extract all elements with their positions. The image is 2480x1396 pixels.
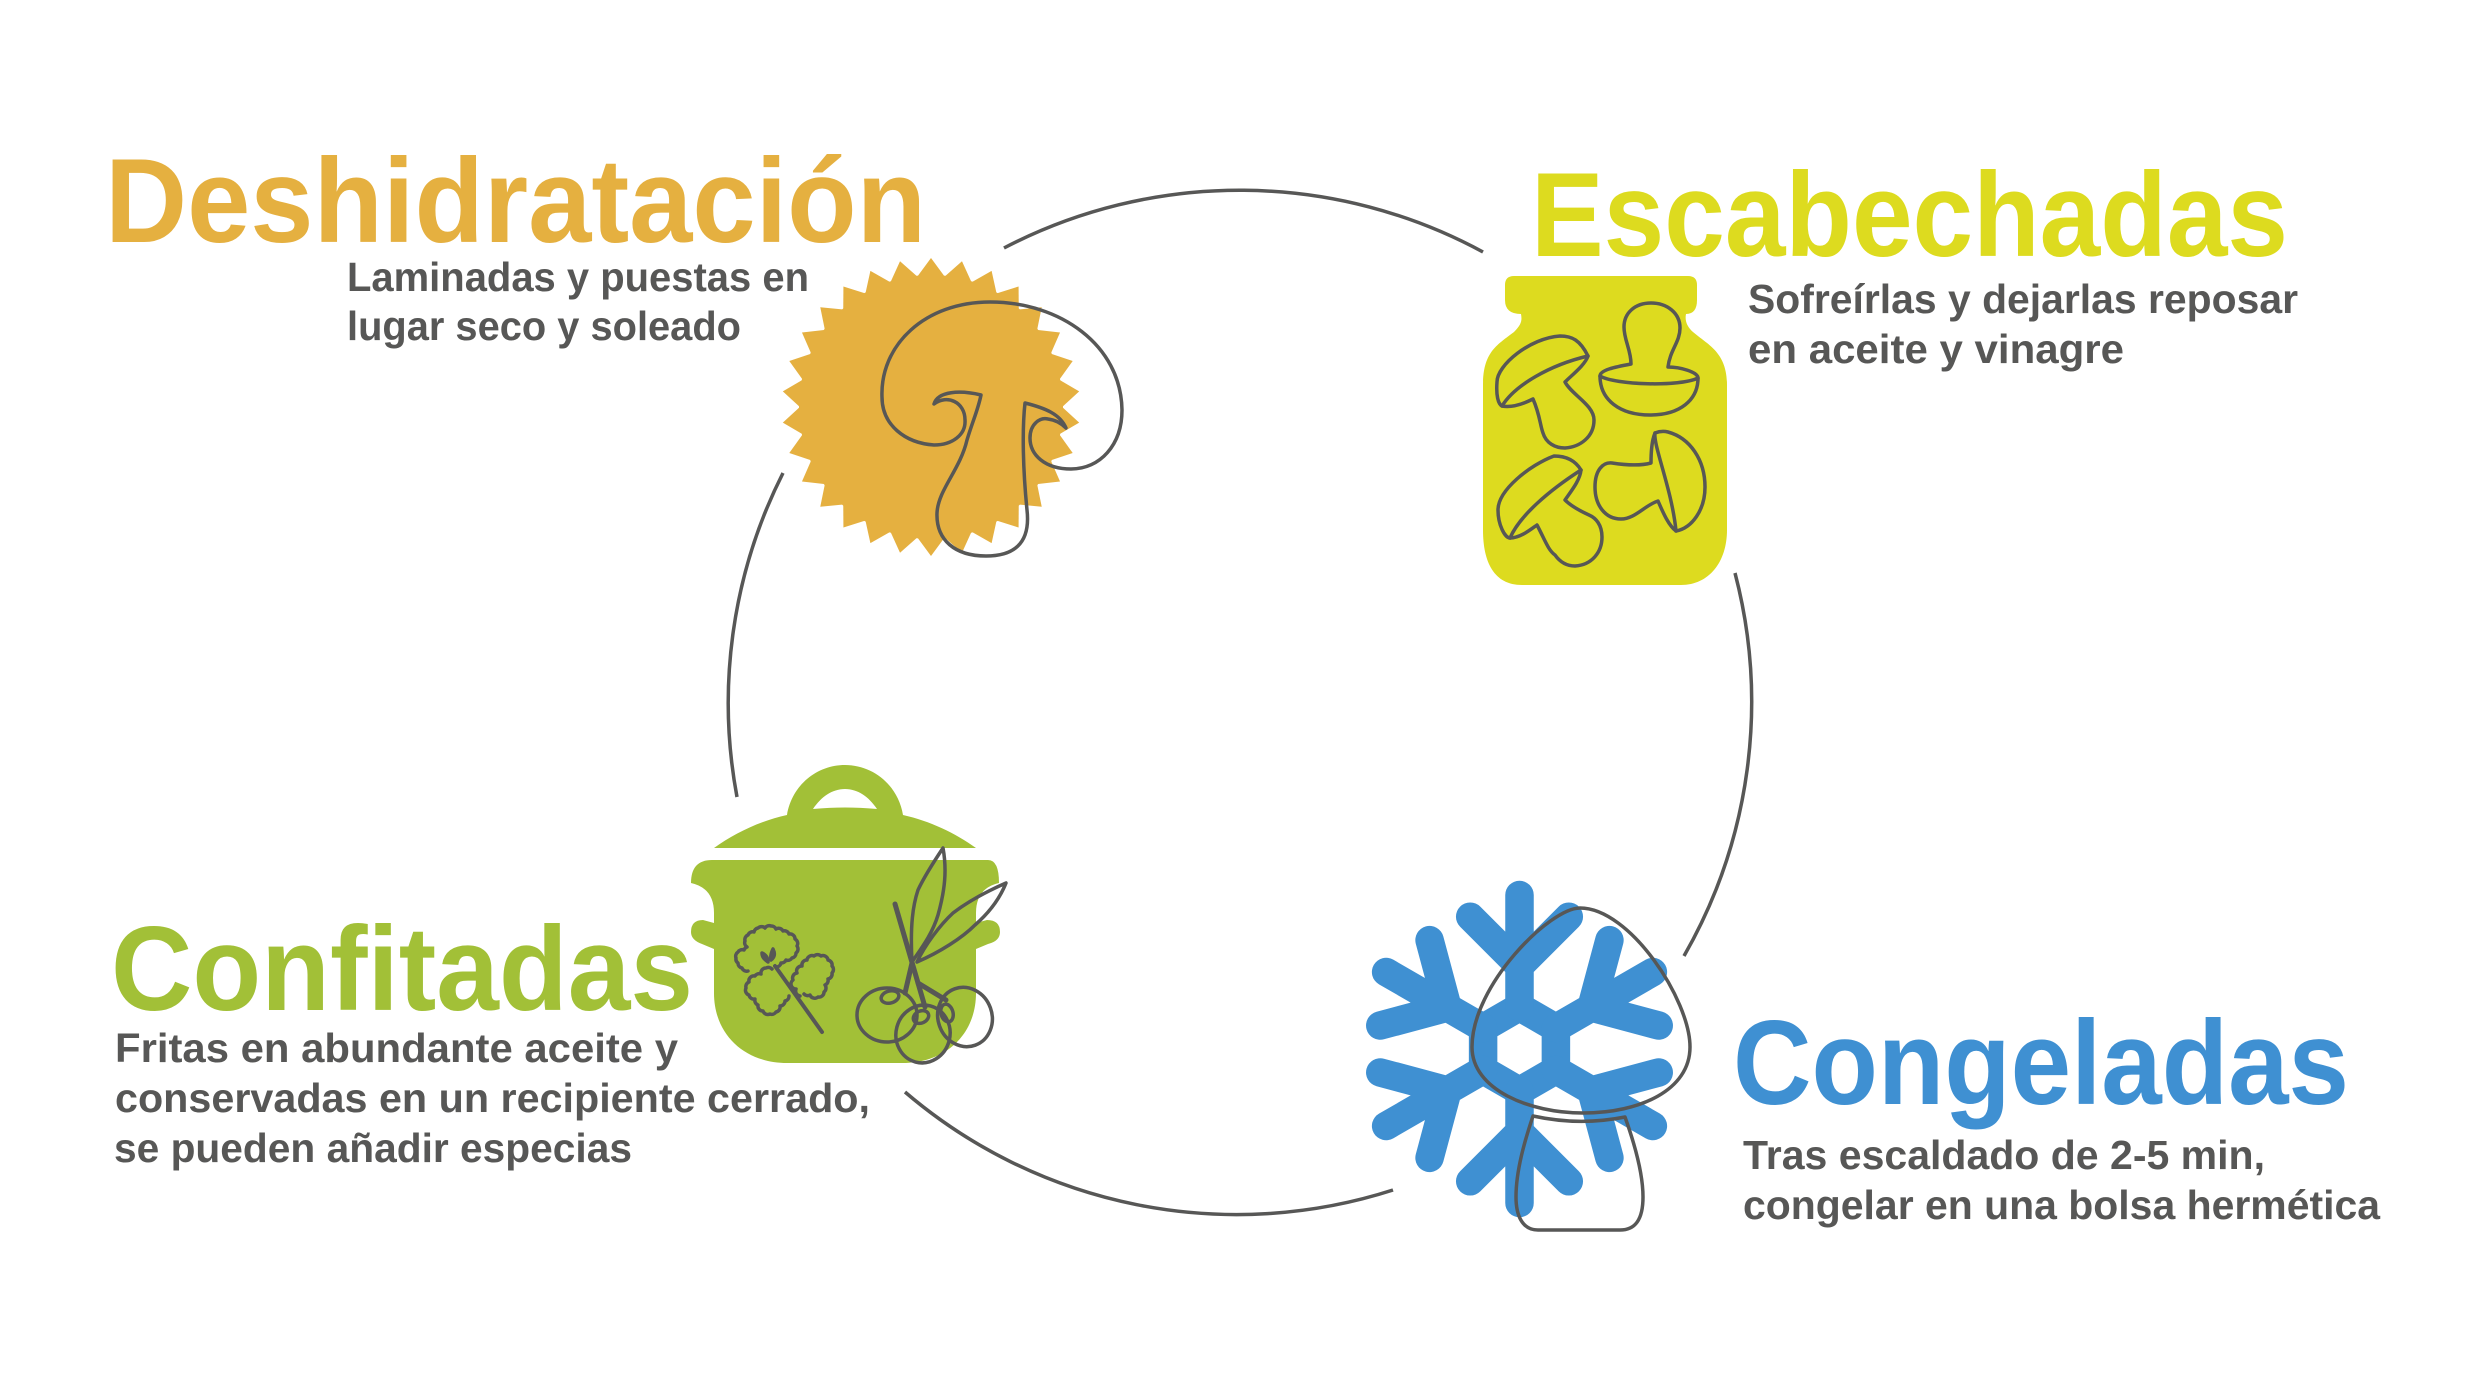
title: Congeladas: Congeladas: [1733, 996, 2349, 1130]
icon: cooking pot: [691, 765, 1000, 1063]
icon: mushrooms in jar: [1497, 303, 1705, 566]
icon: sliced mushroom outline: [882, 302, 1122, 556]
icon: parsley sprig: [736, 926, 833, 1032]
title: Escabechadas: Escabechadas: [1531, 148, 2288, 282]
description: Deshidratación: lugar seco y soleado: [347, 303, 741, 349]
panel: Deshidratación: [105, 134, 1122, 556]
description: Congeladas: Tras escaldado de 2-5 min,: [1743, 1132, 2265, 1178]
description: Confitadas: se pueden añadir especias: [114, 1125, 632, 1171]
description: Escabechadas: Sofreírlas y dejarlas reposar: [1748, 276, 2298, 322]
description: Congeladas: congelar en una bolsa hermética: [1743, 1182, 2381, 1228]
panel: Confitadas: [111, 765, 1006, 1171]
panel: Escabechadas: [1483, 148, 2298, 585]
icon: sun burst: [781, 258, 1081, 556]
title: Deshidratación: Deshidratación: [105, 134, 926, 268]
icon: snowflake: [1361, 895, 1678, 1203]
description: Escabechadas: en aceite y vinagre: [1748, 326, 2124, 372]
icon: jar: [1483, 276, 1727, 585]
description: Deshidratación: Laminadas y puestas en: [347, 254, 809, 300]
icon: mushroom outline: [1472, 908, 1690, 1230]
description: Confitadas: conservadas en un recipiente cerrado,: [115, 1075, 870, 1121]
description: Confitadas: Fritas en abundante aceite y: [115, 1025, 678, 1071]
cycle ring arcs: [728, 190, 1752, 1215]
title: Confitadas: Confitadas: [111, 902, 693, 1036]
icon: olive branch: [857, 848, 1006, 1069]
panel: Congeladas: [1361, 895, 2381, 1230]
